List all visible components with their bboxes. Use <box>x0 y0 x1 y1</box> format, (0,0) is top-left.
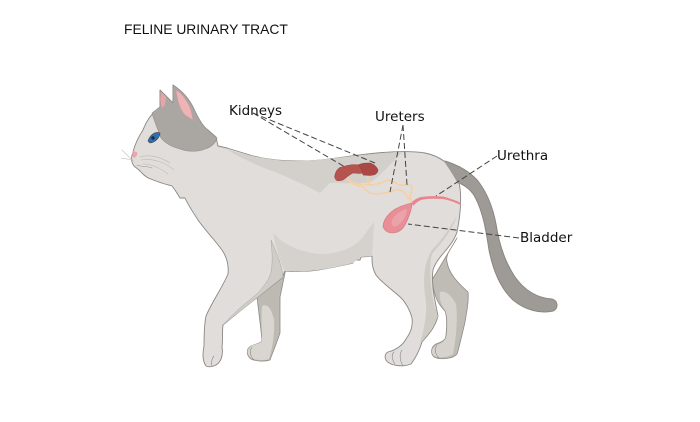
label: Kidneys: Kidneys <box>229 103 282 119</box>
cat body and head <box>132 85 461 367</box>
urethra leader <box>436 156 497 196</box>
nose <box>132 151 137 158</box>
title: FELINE URINARY TRACT <box>124 21 288 37</box>
kidneys leader 2 <box>253 113 375 163</box>
far hind leg <box>432 238 468 359</box>
far front leg <box>247 268 286 361</box>
kidneys <box>335 163 378 181</box>
foreleg crease <box>223 240 283 325</box>
label: Ureters: Ureters <box>375 109 425 125</box>
right kidney <box>358 163 378 175</box>
whiskers <box>121 150 174 174</box>
bladder leader <box>408 224 519 238</box>
tail base wedge over rump <box>443 160 462 184</box>
left kidney <box>335 165 363 181</box>
label: Urethra: Urethra <box>497 148 548 164</box>
near ear inner <box>176 90 193 120</box>
leader lines <box>253 113 519 238</box>
bladder <box>383 203 412 233</box>
ureters <box>348 175 412 203</box>
gray head patch <box>152 85 217 151</box>
hind leg shading <box>420 215 457 344</box>
back and flank shading <box>226 149 403 193</box>
kidneys leader 1 <box>253 113 345 167</box>
far hind leg highlight <box>432 292 457 357</box>
far front leg highlight <box>248 305 274 360</box>
pupil <box>151 136 155 140</box>
urethra <box>412 196 461 206</box>
label: Bladder: Bladder <box>520 230 573 246</box>
ureters leader 2 <box>403 125 407 185</box>
ureters leader 1 <box>390 125 403 192</box>
eye <box>148 132 160 143</box>
far ear inner <box>160 92 166 108</box>
mouth <box>137 165 152 168</box>
cat tail <box>445 161 557 312</box>
cat illustration <box>121 85 557 367</box>
bladder highlight <box>392 209 407 227</box>
belly shading <box>273 222 374 272</box>
paw toes <box>212 345 439 366</box>
